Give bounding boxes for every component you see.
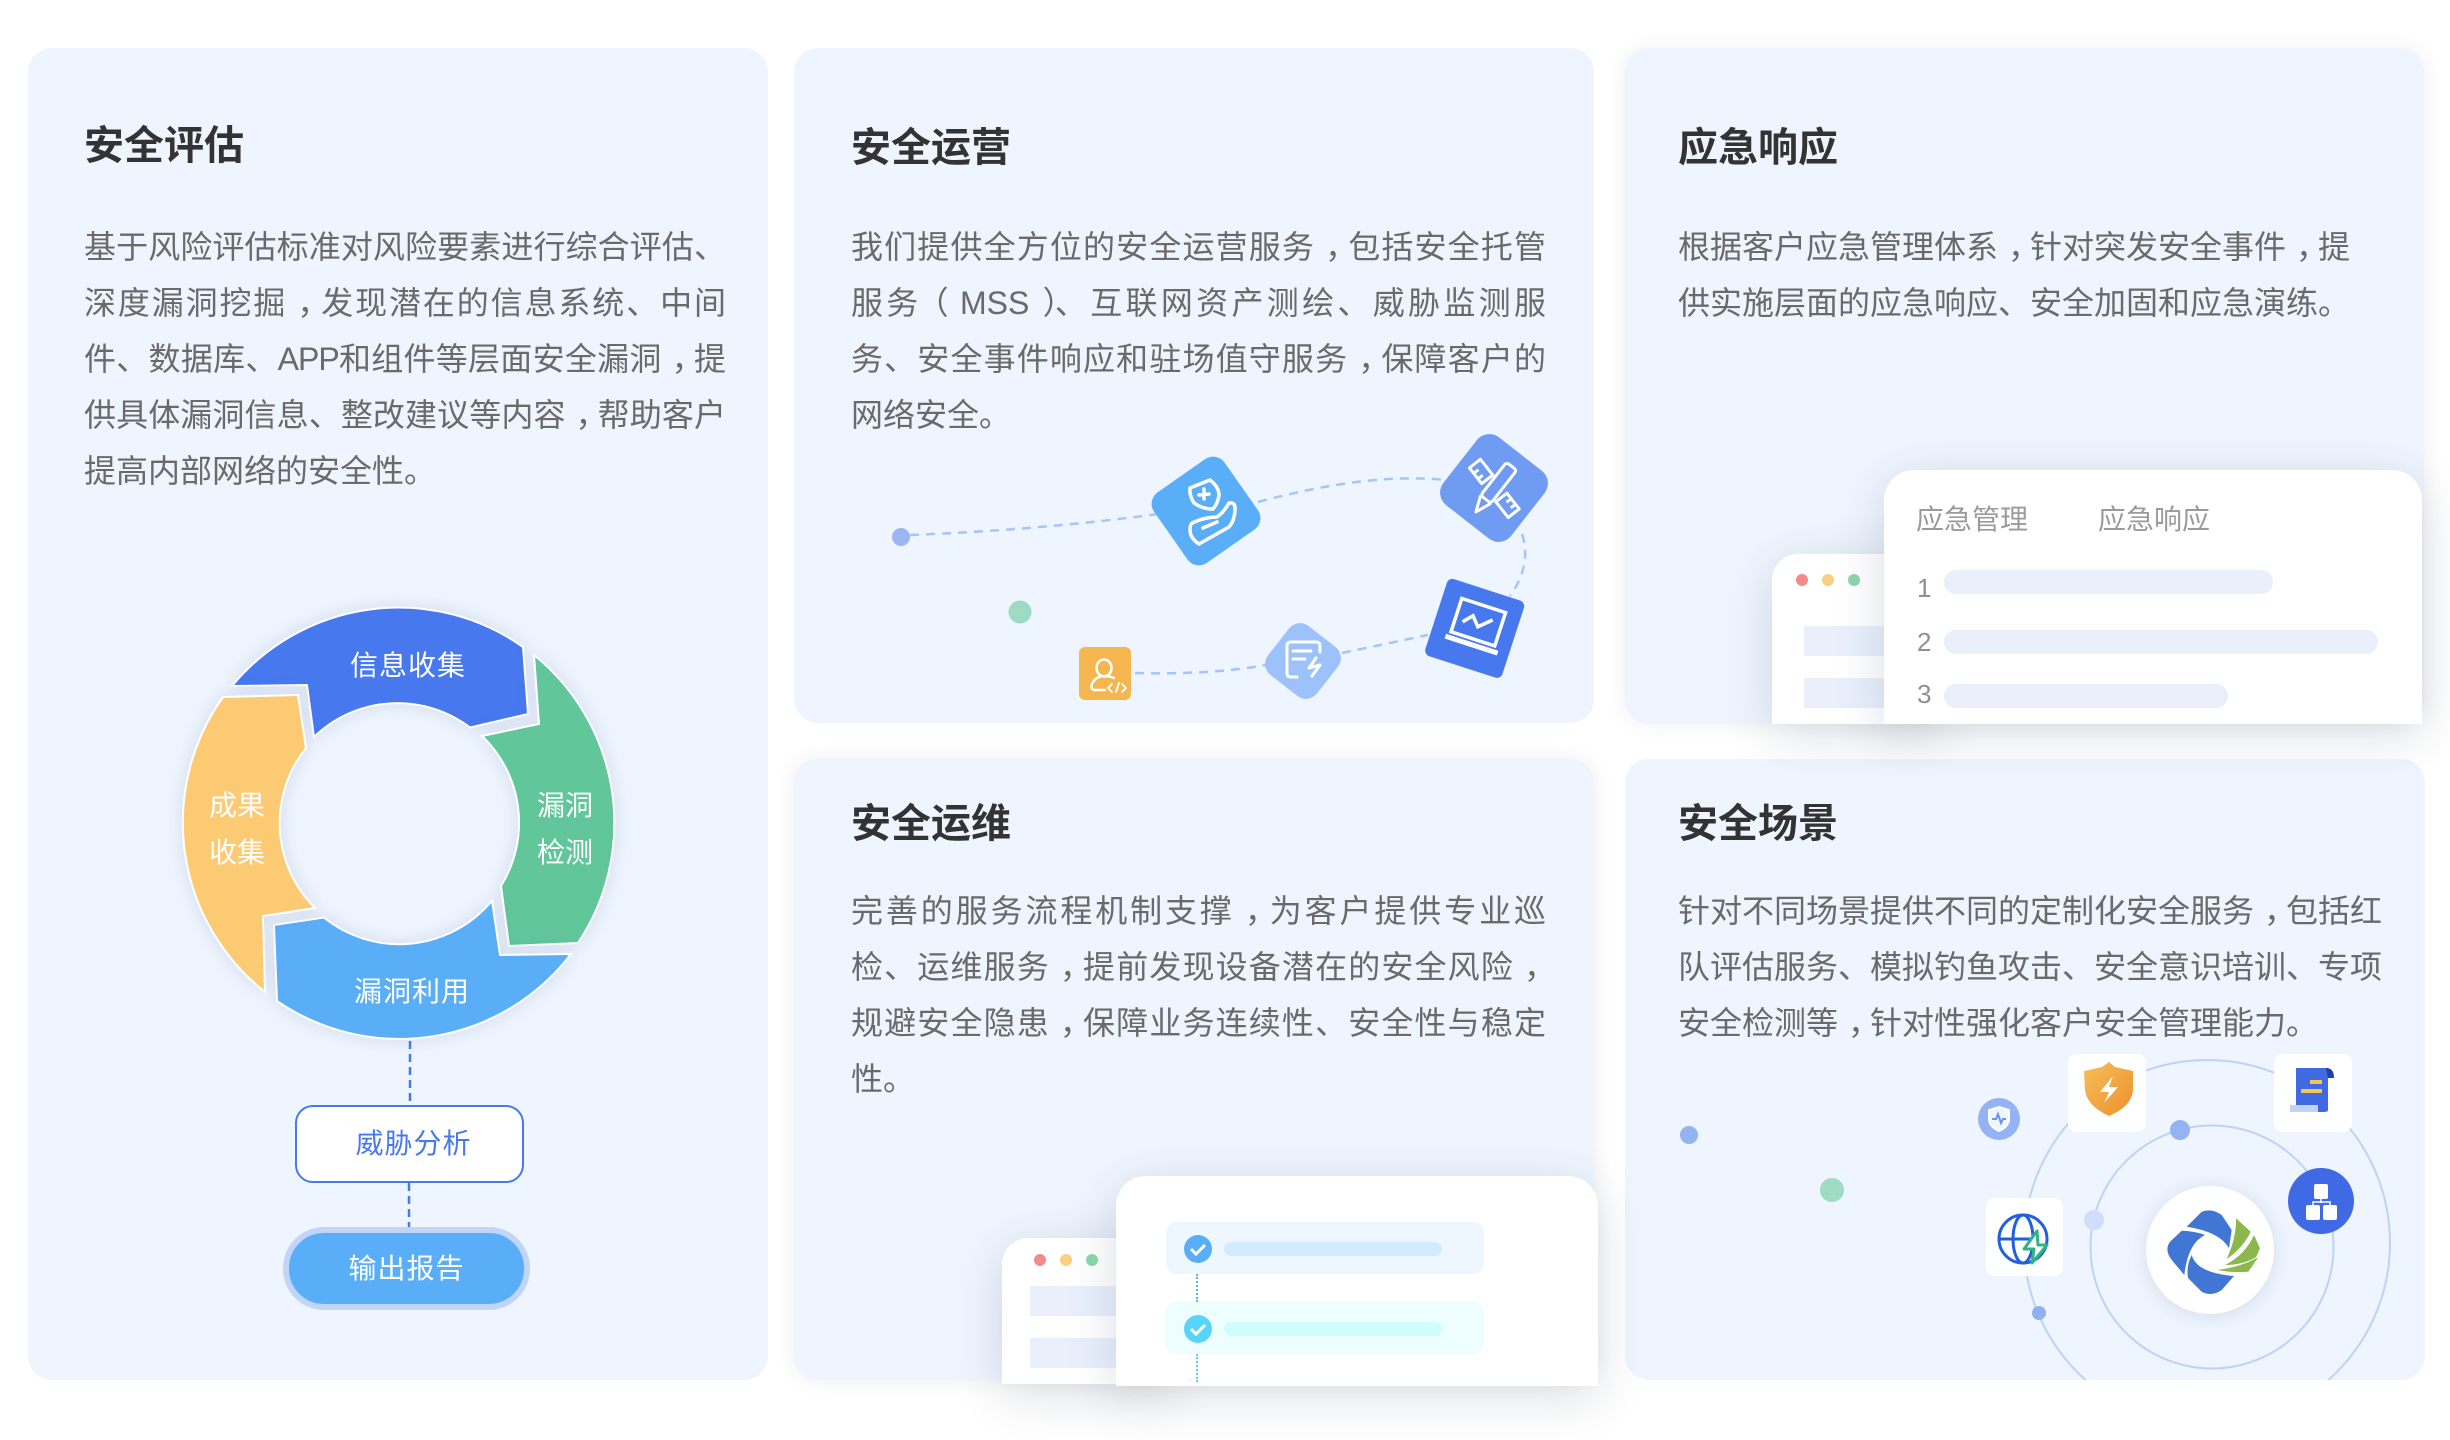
panel: 安全运营	[794, 48, 1594, 723]
dot: 起点	[892, 528, 910, 546]
text block: 安全运维说明	[851, 893, 1546, 1097]
text block: 安全运营说明: 网络安全。	[851, 397, 1011, 433]
label: 漏洞检测	[537, 790, 593, 868]
tab: 应急管理: 应急管理	[1916, 504, 2028, 535]
text block: 安全场景说明	[1678, 893, 2382, 1041]
icon: 监测屏幕	[1424, 577, 1526, 679]
placeholder row 1	[1030, 1286, 1162, 1316]
text block: 安全运营说明: 务、安全事件响应和驻场值守服务 ，保障客户的	[851, 341, 1546, 377]
icon: 地球闪电	[1986, 1198, 2063, 1276]
mock window: 运维前景窗	[1116, 1176, 1598, 1386]
segment: 漏洞利用	[274, 901, 571, 1039]
task bar 2	[1224, 1322, 1442, 1336]
icon: small shield	[1978, 1098, 2020, 1140]
connector 2	[1196, 1354, 1198, 1382]
row number 2: 2	[1917, 627, 1931, 657]
orbit: outer	[2024, 1060, 2390, 1426]
label: 漏洞检测: 漏洞	[537, 790, 593, 821]
label: 成果收集: 成果	[209, 790, 265, 821]
window dot: red	[1034, 1254, 1046, 1266]
button: 输出报告	[283, 1227, 530, 1310]
text block: 安全运维说明: 检、运维服务 ，提前发现设备潜在的安全风险 ，	[851, 949, 1546, 985]
text block: 安全运维说明: 规避安全隐患 ，保障业务连续性、安全性与稳定	[851, 1005, 1546, 1041]
text block: 应急响应说明: 供实施层面的应急响应、安全加固和应急演练。	[1678, 285, 2350, 321]
panel: 安全场景	[1625, 759, 2425, 1380]
text block: 安全场景说明: 安全检测等 ，针对性强化客户安全管理能力。	[1678, 1005, 2318, 1041]
text block: 安全运营说明	[851, 229, 1546, 433]
row bar 2	[1944, 630, 2378, 654]
text block: 应急响应说明: 根据客户应急管理体系 ，针对突发安全事件 ，提	[1678, 229, 2350, 265]
text block: 安全评估说明: 供具体漏洞信息、整改建议等内容 ，帮助客户	[84, 397, 726, 433]
illustration: 运营流程图标	[892, 434, 1548, 700]
placeholder row 2	[1804, 678, 1932, 708]
icon: 网络结构	[2288, 1168, 2354, 1234]
dashed route	[910, 478, 1525, 673]
task bar 1	[1224, 1242, 1442, 1256]
label: 漏洞检测: 检测	[537, 837, 593, 868]
orbit: inner	[2090, 1126, 2334, 1368]
connector 1	[1196, 1274, 1198, 1302]
text block: 安全运营说明: 服务（MSS ）、互联网资产测绘、威胁监测服	[851, 285, 1546, 321]
heading: 安全评估: 安全评估	[84, 124, 244, 168]
label: 成果收集	[209, 790, 265, 868]
icon: 铅笔直尺	[1434, 428, 1554, 548]
label: 成果收集: 收集	[209, 837, 265, 868]
placeholder row 2	[1030, 1338, 1162, 1368]
box: 威胁分析: 威胁分析	[355, 1128, 472, 1159]
text block: 安全运营说明: 我们提供全方位的安全运营服务 ，包括安全托管	[851, 229, 1546, 265]
window dot: yellow	[1060, 1254, 1072, 1266]
chart: 评估流程环形图	[177, 602, 620, 1227]
text block: 应急响应说明	[1678, 229, 2350, 321]
dot: 绿色	[1008, 600, 1032, 624]
mock window: 运维背景窗	[1002, 1238, 1162, 1384]
mock window: 应急响应背景窗	[1772, 554, 1932, 724]
illustration: 安全场景轨道图	[1680, 1054, 2391, 1380]
panel: 安全评估	[28, 48, 768, 1380]
mock window: 应急响应前景窗	[1884, 470, 2422, 724]
placeholder row 1	[1804, 626, 1932, 656]
panel: 安全运维	[794, 759, 1594, 1380]
row bar 3	[1944, 684, 2228, 708]
text block: 安全评估说明: 提高内部网络的安全性。	[84, 453, 436, 489]
text block: 安全评估说明: 件、数据库、APP和组件等层面安全漏洞 ，提	[84, 341, 726, 377]
window dot: yellow	[1822, 574, 1834, 586]
label: 信息收集: 信息收集	[350, 650, 466, 681]
icon: 开发人员	[1079, 647, 1131, 700]
heading: 应急响应: 应急响应	[1678, 126, 1838, 170]
segment: 成果收集	[183, 695, 315, 992]
row number 1: 1	[1917, 573, 1931, 603]
window dot: red	[1796, 574, 1808, 586]
segment: 信息收集	[232, 608, 528, 737]
panel: 应急响应	[1625, 48, 2424, 724]
dot: left blue	[1680, 1126, 1698, 1144]
tab: 应急响应: 应急响应	[2098, 504, 2210, 535]
heading: 安全运维: 安全运维	[851, 802, 1011, 846]
window dot: green	[1086, 1254, 1098, 1266]
dot: green	[1820, 1178, 1844, 1202]
text block: 安全评估说明	[84, 229, 726, 489]
icon: 事件响应	[1259, 617, 1347, 705]
text block: 安全场景说明: 队评估服务、模拟钓鱼攻击、安全意识培训、专项	[1678, 949, 2382, 985]
row number 3: 3	[1917, 679, 1931, 709]
dot: orbit top	[2170, 1120, 2190, 1140]
check icon 2	[1184, 1315, 1212, 1343]
check icon 1	[1184, 1235, 1212, 1263]
task row 1	[1166, 1222, 1484, 1274]
dot: orbit pale	[2084, 1210, 2104, 1230]
box: 威胁分析	[295, 1105, 524, 1183]
text block: 安全场景说明: 针对不同场景提供不同的定制化安全服务 ，包括红	[1678, 893, 2382, 929]
task row 2	[1166, 1302, 1484, 1354]
text block: 安全评估说明: 基于风险评估标准对风险要素进行综合评估、	[84, 229, 726, 265]
segment: 漏洞检测	[482, 655, 614, 946]
logo: 中心标志	[2146, 1186, 2274, 1314]
heading: 安全运营: 安全运营	[851, 126, 1011, 170]
text block: 安全运维说明: 完善的服务流程机制支撑 ，为客户提供专业巡	[851, 893, 1546, 929]
icon: 文档卷轴	[2274, 1054, 2352, 1132]
dot: orbit small	[2032, 1306, 2046, 1320]
button: 输出报告: 输出报告	[348, 1253, 464, 1284]
text block: 安全评估说明: 深度漏洞挖掘 ，发现潜在的信息系统、中间	[84, 285, 726, 321]
heading: 安全场景: 安全场景	[1678, 802, 1838, 846]
icon: 橙色盾牌	[2068, 1054, 2146, 1132]
connector: 威胁分析到输出报告	[408, 1183, 410, 1227]
icon: 托管服务	[1146, 451, 1266, 571]
window dot: green	[1848, 574, 1860, 586]
label: 漏洞利用: 漏洞利用	[354, 976, 470, 1007]
row bar 1	[1944, 570, 2273, 594]
text block: 安全运维说明: 性。	[851, 1061, 915, 1097]
connector: 环到威胁分析	[409, 1041, 411, 1105]
